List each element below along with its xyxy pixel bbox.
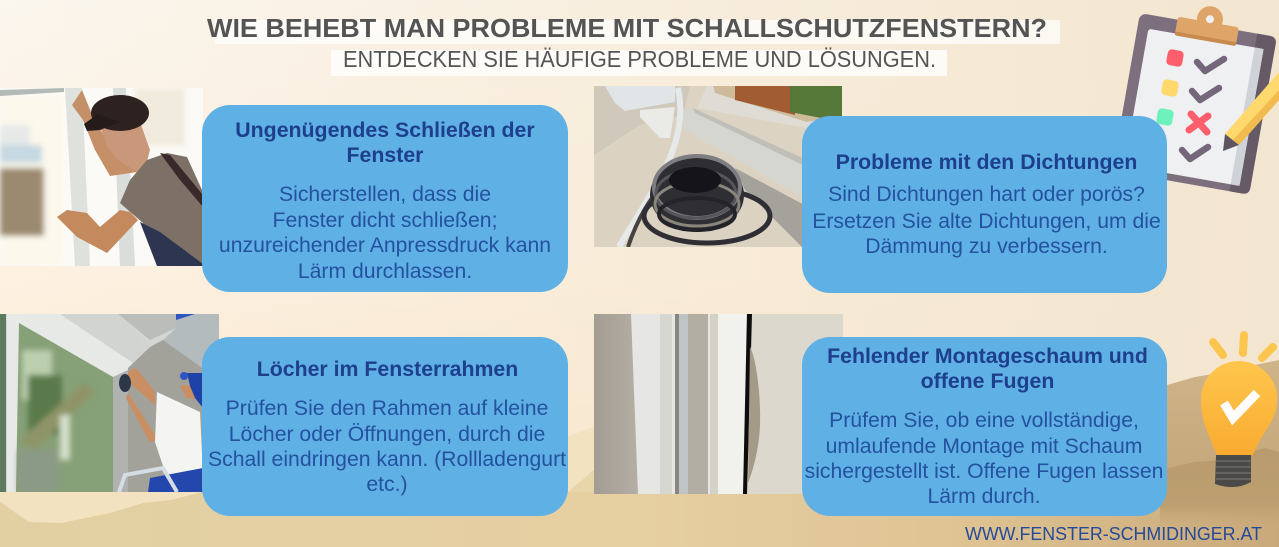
card: Fehlender Montageschaum und offene Fugen: sichergestellt ist. Offene Fugen lassen [805, 460, 1163, 483]
card: Löcher im Fensterrahmen: Schall eindringen kann. (Rollladengurt [208, 448, 566, 471]
card: Fehlender Montageschaum und offene Fugen: offene Fugen [921, 369, 1054, 393]
title: WIE BEHEBT MAN PROBLEME MIT SCHALLSCHUTZFENSTERN? [207, 13, 1047, 43]
footer website: WWW.FENSTER-SCHMIDINGER.AT [965, 524, 1262, 544]
photo: worker closing a window [0, 88, 203, 266]
card: Ungenügendes Schließen der Fenster: Fenster [347, 143, 423, 167]
subtitle: ENTDECKEN SIE HÄUFIGE PROBLEME UND LÖSUNGEN. [343, 46, 936, 72]
card: Probleme mit den Dichtungen [802, 116, 1167, 293]
photo: coil of old window seals [594, 86, 842, 247]
card: Ungenügendes Schließen der Fenster: Ungenügendes Schließen der [235, 118, 535, 142]
card: Löcher im Fensterrahmen: etc.) [366, 473, 408, 496]
card: Ungenügendes Schließen der Fenster: Fenster dicht schließen; [273, 209, 497, 232]
card: Fehlender Montageschaum und offene Fugen: Lärm durch. [927, 485, 1041, 508]
card: Probleme mit den Dichtungen: Ersetzen Sie alte Dichtungen, um die [812, 210, 1161, 233]
card: Fehlender Montageschaum und offene Fugen [802, 337, 1167, 516]
card: Löcher im Fensterrahmen: Prüfen Sie den Rahmen auf kleine [226, 397, 548, 420]
icon: light bulb with check [1201, 335, 1277, 487]
card: Fehlender Montageschaum und offene Fugen: Fehlender Montageschaum und [827, 344, 1148, 368]
photo: window frame gap [594, 314, 843, 494]
card: Probleme mit den Dichtungen: Sind Dichtungen hart oder porös? [828, 183, 1145, 206]
card: Löcher im Fensterrahmen: Löcher im Fensterrahmen [257, 357, 518, 381]
card: Ungenügendes Schließen der Fenster [202, 105, 568, 292]
card: Probleme mit den Dichtungen: Dämmung zu verbessern. [865, 235, 1108, 258]
card: Löcher im Fensterrahmen [202, 337, 568, 516]
card: Ungenügendes Schließen der Fenster: Lärm durchlassen. [298, 260, 472, 283]
clipboard checklist icon [1112, 0, 1279, 195]
card: Probleme mit den Dichtungen: Probleme mit den Dichtungen [836, 150, 1137, 174]
card: Löcher im Fensterrahmen: Löcher oder Öffnungen, durch die [229, 422, 545, 446]
card: Ungenügendes Schließen der Fenster: unzureichender Anpressdruck kann [219, 234, 551, 257]
card: Fehlender Montageschaum und offene Fugen: Prüfem Sie, ob eine vollständige, [829, 409, 1139, 432]
card: Ungenügendes Schließen der Fenster: Sicherstellen, dass die [279, 183, 491, 206]
card: Fehlender Montageschaum und offene Fugen: umlaufende Montage mit Schaum [826, 435, 1142, 458]
photo: worker on roller shutter [0, 314, 219, 492]
